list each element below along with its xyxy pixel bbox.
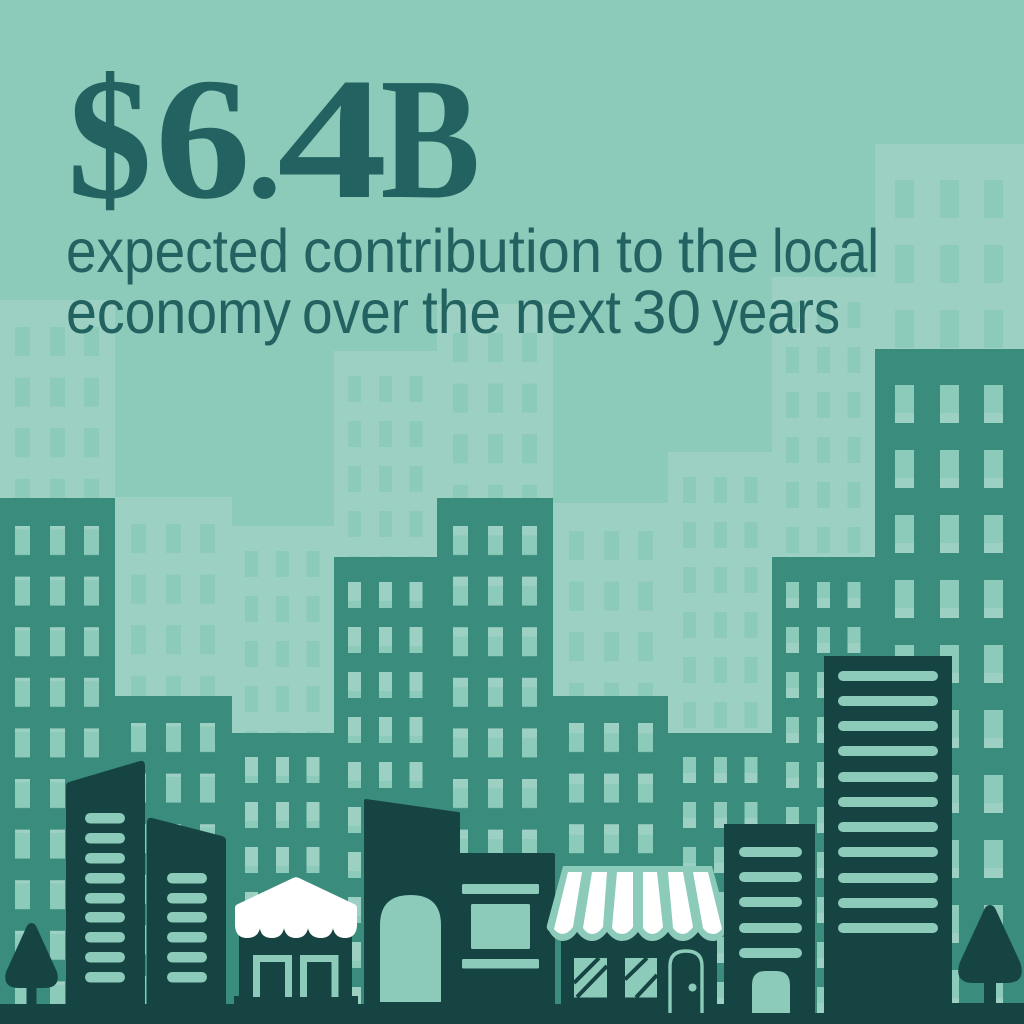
square window <box>471 904 530 949</box>
description line 1: local <box>772 217 879 285</box>
lower sign bar <box>462 959 539 968</box>
headline figure <box>68 42 480 236</box>
small building with pill windows <box>724 824 815 1014</box>
tree: right <box>958 905 1022 1005</box>
shop window: left <box>574 958 607 998</box>
tower: second sloped roof <box>147 818 226 1005</box>
upper sign bar <box>462 884 539 894</box>
storefront with striped awning <box>547 866 728 1013</box>
description line 2: next <box>515 278 621 346</box>
small shop with white awning <box>234 877 358 1005</box>
tree: left <box>5 923 58 1005</box>
tower windows: left <box>85 813 125 982</box>
headline figure: 4 <box>277 43 387 235</box>
shop doors <box>256 958 335 997</box>
awning white stripes <box>554 872 722 934</box>
description line 2: years <box>712 278 840 346</box>
pill windows <box>739 847 802 958</box>
ground <box>0 1003 1024 1024</box>
description line 1: contribution <box>303 217 602 285</box>
description line 2 <box>66 278 840 346</box>
headline figure: B <box>380 43 480 236</box>
middle skyline layer: teal buildings with window cut-outs <box>0 349 1024 1024</box>
mid-rise building with arched door <box>364 799 555 1005</box>
description line 2: the <box>422 278 501 346</box>
headline figure: 6 <box>155 42 251 235</box>
description line 2: 30 <box>632 278 701 346</box>
tower windows: second <box>167 873 207 982</box>
pill windows <box>838 671 938 933</box>
tall tower with pill windows <box>824 656 952 1016</box>
description line 1: to <box>616 217 664 285</box>
headline figure: $ <box>68 43 152 236</box>
tower: left sloped roof <box>66 761 145 1005</box>
description line 1 <box>66 217 879 285</box>
description line 1: the <box>678 217 759 285</box>
description text <box>66 217 879 346</box>
arched door <box>380 895 441 1002</box>
awning outline <box>547 866 728 941</box>
headline figure: . <box>247 76 282 227</box>
description line 2: over <box>302 278 409 346</box>
white scalloped awning <box>235 877 357 938</box>
door <box>752 971 790 1013</box>
description line 1: expected <box>66 217 289 285</box>
shop window: right <box>625 958 657 998</box>
shop door <box>670 951 702 1013</box>
description line 2: economy <box>66 278 291 346</box>
